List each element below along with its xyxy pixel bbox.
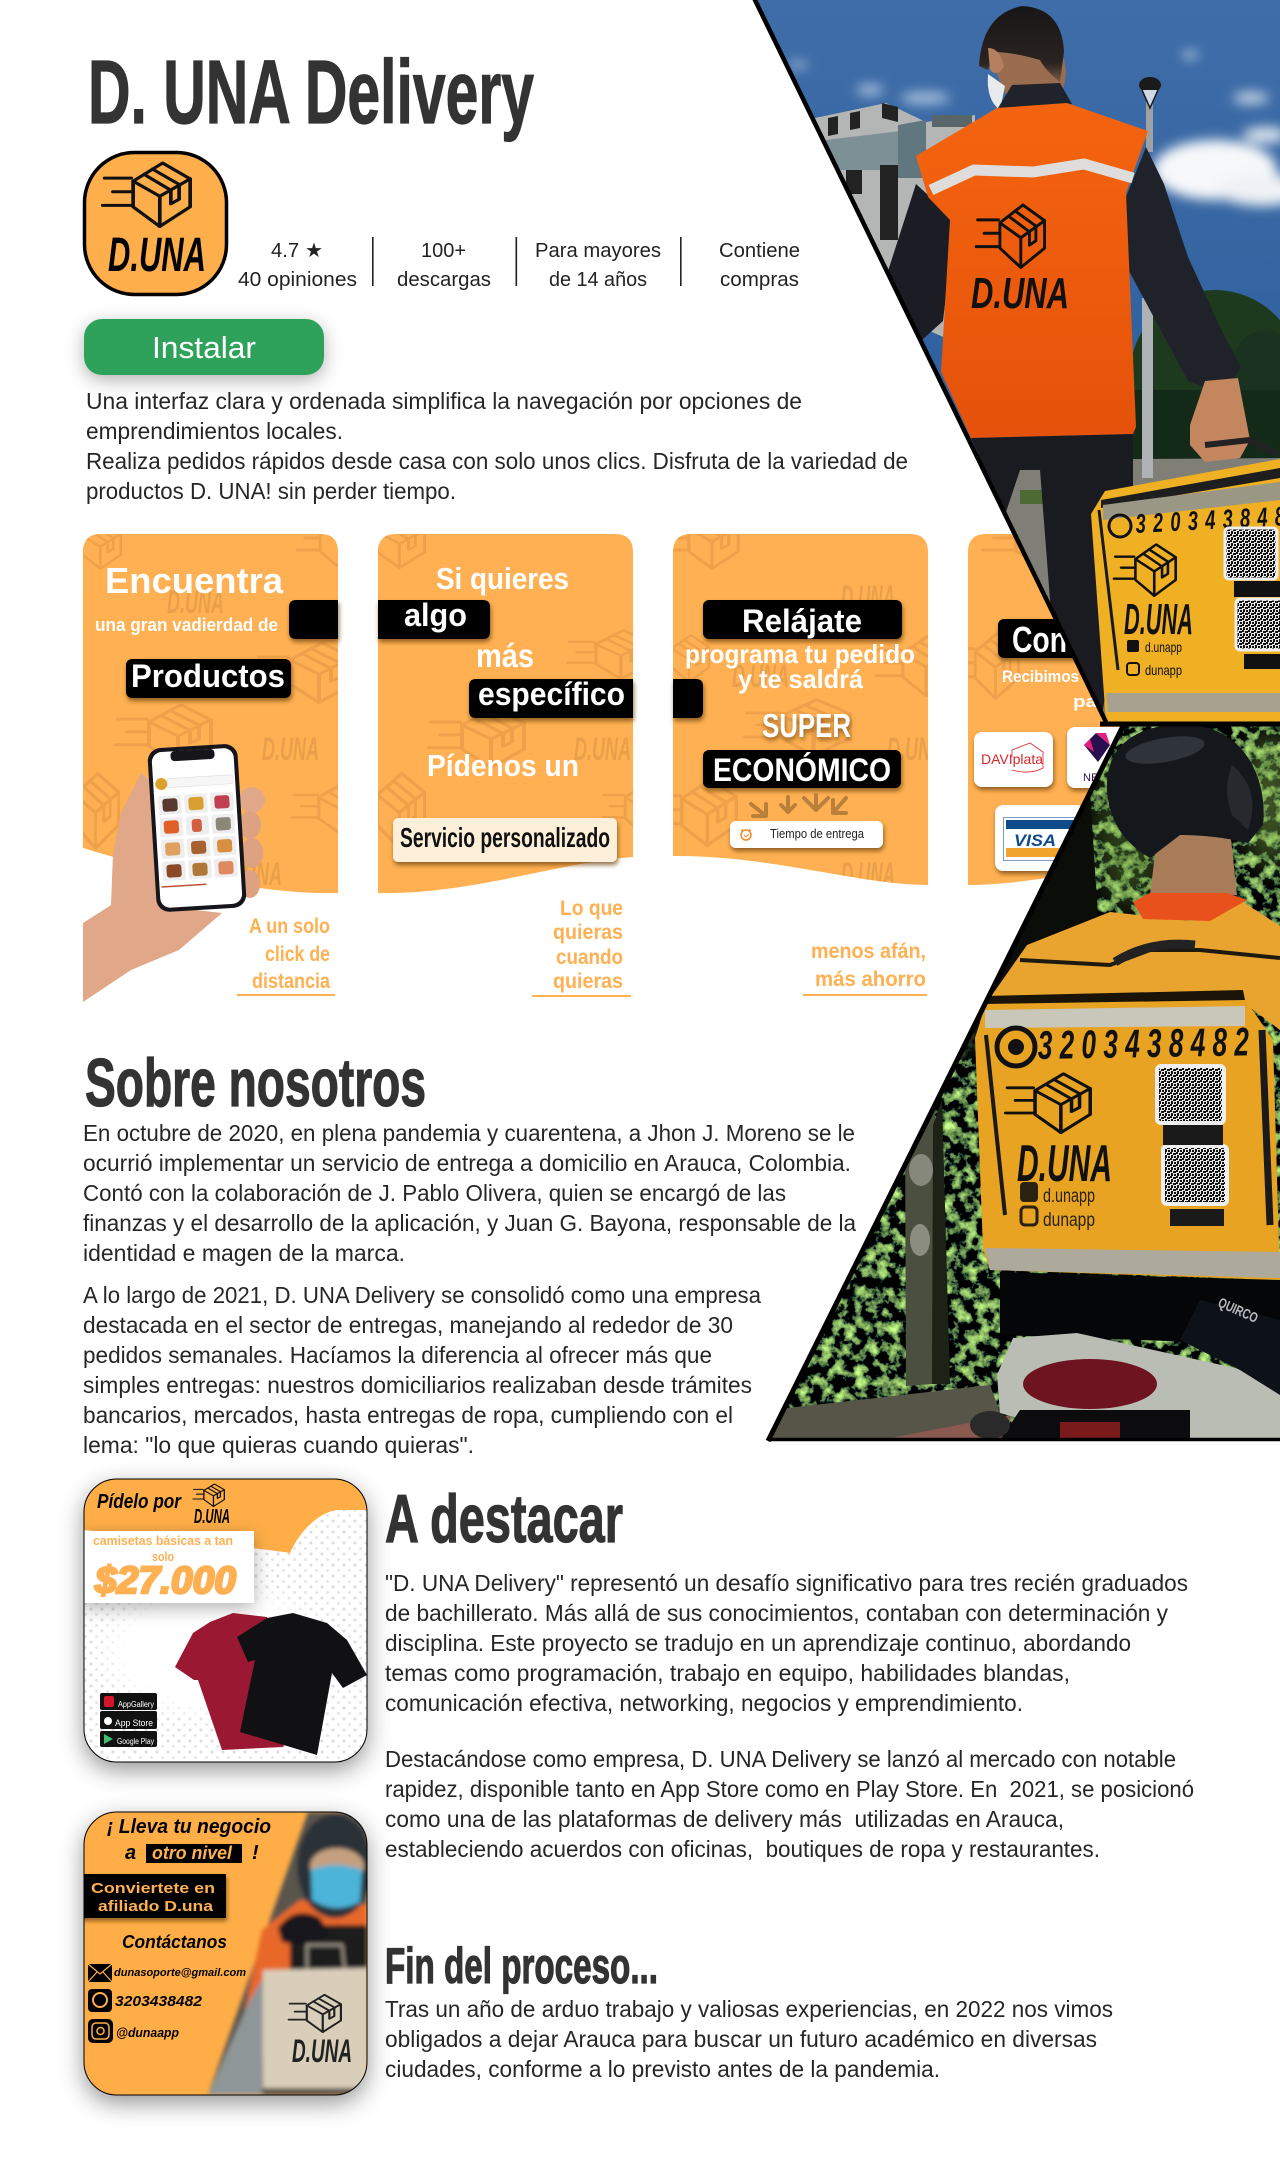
install button: Instalar xyxy=(152,330,256,365)
text: sobre nosotros: simples entregas: nuestros domiciliarios realizaban desde trámites xyxy=(83,1372,752,1398)
con label xyxy=(998,619,1108,660)
intro text: Realiza pedidos rápidos desde casa con solo unos clics. Disfruta de la variedad de xyxy=(86,448,908,474)
delivery bag: D.UNA xyxy=(1124,595,1193,644)
bag QR codes xyxy=(1225,528,1280,669)
algo label: algo xyxy=(404,597,467,633)
daviplata tile: DAVIplata xyxy=(981,751,1043,767)
card 2 tagline: quieras xyxy=(553,921,623,944)
promo logo: D.UNA xyxy=(194,1506,230,1528)
vest logo xyxy=(976,205,1045,268)
rating xyxy=(238,240,357,291)
text: fin del proceso xyxy=(385,1996,1113,2082)
card 2 tagline xyxy=(532,897,631,997)
price box xyxy=(80,1531,254,1603)
vest brand: D.UNA xyxy=(971,269,1069,318)
text: a destacar: disciplina. Este proyecto se tradujo en un aprendizaje continuo, abordando xyxy=(385,1630,1131,1656)
bag social xyxy=(1020,1182,1095,1231)
text: a destacar: rapidez, disponible tanto en App Store como en Play Store. En 2021, se posicionó xyxy=(385,1776,1194,1802)
black tab xyxy=(673,679,703,718)
courier photo: D.UNA xyxy=(292,2033,352,2069)
text: a destacar: Destacándose como empresa, D. UNA Delivery se lanzó al mercado con notable xyxy=(385,1746,1176,1772)
hand holding phone xyxy=(83,743,265,1002)
lower dark area xyxy=(1000,1410,1190,1440)
helmet xyxy=(1107,725,1264,858)
card 4 text: Recibimos xyxy=(1002,667,1079,686)
card 2 lines: Si quieres xyxy=(436,561,569,596)
price box: solo xyxy=(152,1549,174,1564)
bag social: dunapp xyxy=(1043,1210,1095,1231)
nequi tile: NEQUI xyxy=(1083,772,1118,784)
wheel xyxy=(970,1411,1010,1439)
panel: card 1 productos: D.UNA xyxy=(225,856,282,892)
card 4 text: pa xyxy=(1073,692,1098,711)
foliage xyxy=(760,720,1280,1445)
scooter label: QUIRCO xyxy=(1216,1294,1261,1326)
contact email: dunasoporte@gmail.com xyxy=(114,1967,246,1979)
más: más xyxy=(476,637,534,674)
productos label: Productos xyxy=(131,658,285,694)
panel: card 2 servicio personalizado: D.UNA xyxy=(574,731,631,767)
bag social xyxy=(1127,639,1182,678)
shirt xyxy=(1133,893,1247,921)
relájate label: Relájate xyxy=(742,603,862,639)
black tab xyxy=(289,600,338,639)
trees xyxy=(1130,290,1280,460)
tree trunk xyxy=(905,1100,950,1386)
card 1 tagline: A un solo xyxy=(249,915,330,938)
jacket sleeves xyxy=(888,147,1241,395)
store badges: AppGallery xyxy=(118,1700,154,1709)
black t-shirt xyxy=(237,1613,367,1755)
backpack lid xyxy=(985,902,1280,1030)
title: D. UNA Delivery xyxy=(88,43,534,143)
panel: card 4 pagos xyxy=(968,534,1120,885)
age rating: Para mayores xyxy=(535,240,661,262)
building xyxy=(815,103,975,340)
contact phone xyxy=(88,1989,203,2012)
panel: card 1 productos: D.UNA xyxy=(167,584,224,620)
street ground xyxy=(1000,458,1280,730)
downloads: descargas xyxy=(397,269,491,291)
text: sobre nosotros: finanzas y el desarrollo de la aplicación, y Juan G. Bayona, responsable de la xyxy=(83,1210,856,1236)
card 3 tagline: más ahorro xyxy=(815,968,926,991)
text: a destacar: comunicación efectiva, networking, negocios y emprendimiento. xyxy=(385,1690,1023,1716)
lamp post xyxy=(1139,77,1161,478)
bag phone number: 3203438482 xyxy=(1037,1020,1249,1068)
in-app purchases: Contiene xyxy=(719,240,800,262)
tail light xyxy=(1023,1359,1157,1409)
photo frame lines xyxy=(754,0,1280,1441)
bag social: d.unapp xyxy=(1145,639,1182,655)
contact instagram xyxy=(88,2019,179,2043)
pavement xyxy=(770,1385,1010,1440)
affiliate box: Conviertete en xyxy=(91,1880,215,1897)
panel: card 3 económico xyxy=(670,534,928,996)
collar xyxy=(998,83,1072,108)
intro text: emprendimientos locales. xyxy=(86,418,343,444)
panel: card 3 económico: D.UNA xyxy=(841,856,895,892)
económico label: ECONÓMICO xyxy=(713,752,891,788)
photo: courier with orange vest xyxy=(740,0,1280,730)
delivery bag xyxy=(1091,459,1280,722)
downloads xyxy=(397,240,491,291)
nequi tile xyxy=(1067,727,1137,788)
heading: fin del proceso: Fin del proceso... xyxy=(385,1938,658,1994)
servicio label xyxy=(393,818,617,862)
super: SUPER xyxy=(762,707,851,744)
card 2 tagline: quieras xyxy=(553,970,623,993)
panel: card 1 productos: D.UNA xyxy=(262,731,319,767)
servicio label: Servicio personalizado xyxy=(400,822,610,853)
card 1 tagline xyxy=(237,915,335,996)
relájate label xyxy=(703,600,902,639)
text: sobre nosotros: bancarios, mercados, hasta entregas de ropa, cumpliendo con el xyxy=(83,1402,733,1428)
downloads: 100+ xyxy=(421,240,466,262)
price box: $27.000 xyxy=(94,1560,236,1602)
icon: app logo: D.UNA xyxy=(108,229,206,282)
head xyxy=(979,6,1066,110)
in-app purchases: compras xyxy=(720,269,799,291)
text: sobre nosotros: destacada en el sector de entregas, manejando al rededor de 30 xyxy=(83,1312,733,1338)
panel: card 1 productos xyxy=(83,534,343,1002)
text: sobre nosotros: Contó con la colaboración de J. Pablo Olivera, quien se encargó de las xyxy=(83,1180,786,1206)
text: sobre nosotros xyxy=(83,1120,856,1458)
price box: camisetas básicas a tan xyxy=(93,1533,233,1548)
promo headline: a xyxy=(125,1842,136,1864)
card 2 tagline: cuando xyxy=(556,946,623,969)
rating: 4.7 ★ xyxy=(271,240,323,262)
panel: card 3 económico: D.UNA xyxy=(887,731,944,767)
text: a destacar: "D. UNA Delivery" representó un desafío significativo para tres recién graduados xyxy=(385,1570,1188,1596)
text: a destacar: de bachillerato. Más allá de sus conocimientos, contaban con determinación y xyxy=(385,1600,1168,1626)
hand xyxy=(1190,378,1250,462)
específico label: específico xyxy=(478,676,625,712)
text: sobre nosotros: identidad e magen de la marca. xyxy=(83,1240,405,1266)
store badges xyxy=(100,1693,157,1747)
text: sobre nosotros: En octubre de 2020, en plena pandemia y cuarentena, a Jhon J. Moreno se le xyxy=(83,1120,855,1146)
panel: card 3 económico: D.UNA xyxy=(841,579,895,615)
algo label xyxy=(378,597,490,639)
text: a destacar: temas como programación, trabajo en equipo, habilidades blandas, xyxy=(385,1660,1070,1686)
courier photo xyxy=(208,1812,373,2095)
contact heading: Contáctanos xyxy=(122,1932,227,1952)
card 1 tagline: distancia xyxy=(252,970,330,993)
con label: Con xyxy=(1012,619,1067,660)
text: a destacar xyxy=(385,1570,1194,1862)
text: fin del proceso: obligados a dejar Arauca para buscar un futuro académico en diversas xyxy=(385,2026,1097,2052)
promo headline: otro nivel xyxy=(152,1843,233,1863)
promo headline: ¡ Lleva tu negocio xyxy=(107,1816,271,1838)
app stats xyxy=(238,237,800,291)
whatsapp mark xyxy=(1109,515,1131,537)
contact instagram: @dunaapp xyxy=(116,2025,179,2040)
bag social: dunapp xyxy=(1145,662,1182,678)
scooter body xyxy=(997,1333,1280,1440)
daviplata tile xyxy=(974,732,1053,787)
visa tile xyxy=(995,805,1085,871)
panel: affiliate promo xyxy=(80,1812,373,2095)
card 2 tagline: Lo que xyxy=(560,897,623,920)
promo headline: ! xyxy=(252,1842,259,1864)
bag logo xyxy=(1006,1074,1090,1133)
panel: card 3 económico: D.UNA xyxy=(732,658,789,694)
age rating xyxy=(535,240,661,291)
text: fin del proceso: Tras un año de arduo trabajo y valiosas experiencias, en 2022 nos vimos xyxy=(385,1996,1113,2022)
text: sobre nosotros: pedidos semanales. Hacíamos la diferencia al ofrecer más que xyxy=(83,1342,712,1368)
affiliate box xyxy=(80,1874,226,1918)
card 3 subheading xyxy=(685,639,915,694)
under-bag shadow xyxy=(1000,1272,1280,1345)
card 1 tagline: click de xyxy=(265,943,330,966)
photo: rider with backpack xyxy=(760,720,1280,1445)
text: sobre nosotros: A lo largo de 2021, D. UNA Delivery se consolidó como una empresa xyxy=(83,1282,761,1308)
store badges: App Store xyxy=(115,1718,153,1728)
contact email xyxy=(88,1964,246,1982)
text: a destacar: como una de las plataformas de delivery más utilizadas en Arauca, xyxy=(385,1806,1064,1832)
backpack body xyxy=(975,996,1280,1280)
promo headline xyxy=(107,1816,271,1864)
bag brand: D.UNA xyxy=(1017,1135,1112,1193)
pídenos: Pídenos un xyxy=(427,748,579,783)
bag handle xyxy=(1205,440,1278,455)
whatsapp mark xyxy=(997,1028,1035,1066)
age rating: de 14 años xyxy=(549,269,647,291)
heading: sobre nosotros: Sobre nosotros xyxy=(85,1045,426,1121)
heading: a destacar: A destacar xyxy=(385,1481,623,1557)
arrows xyxy=(751,795,846,816)
neck xyxy=(1150,830,1237,895)
in-app purchases xyxy=(719,240,800,291)
scooter seat xyxy=(1180,1300,1280,1395)
intro text xyxy=(86,388,908,504)
phone xyxy=(147,743,247,913)
bag logo xyxy=(1114,544,1176,596)
panel: card 2 servicio personalizado xyxy=(375,534,638,997)
panel: t-shirt promo xyxy=(80,1479,367,1762)
promo heading: Pídelo por xyxy=(97,1491,182,1513)
visa tile: VISA xyxy=(1014,831,1056,850)
red t-shirt xyxy=(175,1613,290,1750)
card 3 tagline: menos afán, xyxy=(811,940,926,963)
text: sobre nosotros: lema: "lo que quieras cuando quieras". xyxy=(83,1432,474,1458)
reflective strip xyxy=(931,164,1133,190)
bag QR codes xyxy=(1157,1066,1227,1226)
card 1 heading: Encuentra xyxy=(105,560,284,601)
install button xyxy=(84,319,324,375)
card 1 subheading: una gran vadierdad de xyxy=(95,615,278,635)
text: fin del proceso: ciudades, conforme a lo previsto antes de la pandemia. xyxy=(385,2056,940,2082)
rating: 40 opiniones xyxy=(238,269,357,291)
store badges: Google Play xyxy=(117,1737,154,1746)
bag social: d.unapp xyxy=(1043,1186,1095,1207)
card 4 text xyxy=(1002,667,1098,711)
text: sobre nosotros: ocurrió implementar un servicio de entrega a domicilio en Arauca, Colombia. xyxy=(83,1150,851,1176)
vest xyxy=(916,103,1148,438)
contact phone: 3203438482 xyxy=(115,1993,203,2010)
dark tree xyxy=(960,797,1098,1060)
delivery time pill xyxy=(730,821,883,848)
clouds xyxy=(788,51,1280,206)
intro text: Una interfaz clara y ordenada simplifica la navegación por opciones de xyxy=(86,388,802,414)
trousers xyxy=(971,434,1133,730)
card 3 subheading: programa tu pedido xyxy=(685,639,915,669)
delivery time pill: Tiempo de entrega xyxy=(770,826,865,841)
text: a destacar: estableciendo acuerdos con oficinas, boutiques de ropa y restaurantes. xyxy=(385,1836,1100,1862)
card 3 tagline xyxy=(803,940,927,996)
affiliate box: afiliado D.una xyxy=(98,1898,214,1915)
promo logo xyxy=(193,1484,230,1528)
card 3 subheading: y te saldrá xyxy=(738,664,864,694)
plate xyxy=(1060,1422,1120,1438)
icon: app logo xyxy=(84,152,226,294)
intro text: productos D. UNA! sin perder tiempo. xyxy=(86,478,456,504)
